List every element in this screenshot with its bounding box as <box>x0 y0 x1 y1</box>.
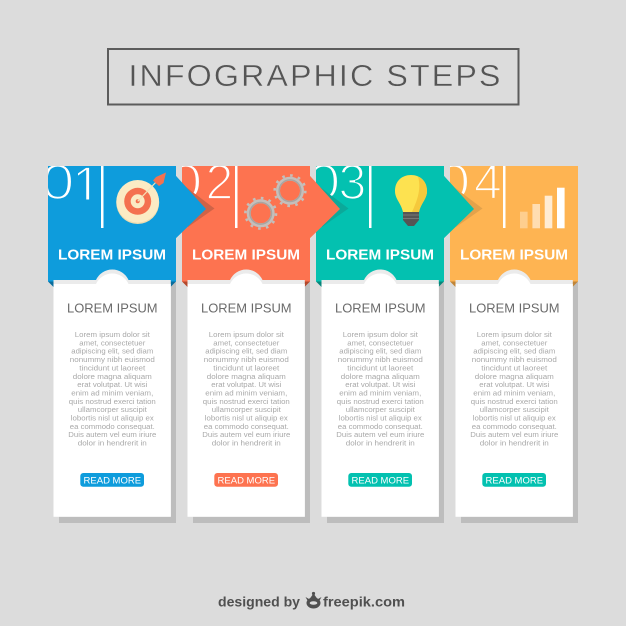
icon: light bulb <box>395 175 427 226</box>
card heading: LOREM IPSUM <box>201 301 292 315</box>
step number 01: 1 <box>72 156 101 216</box>
body text <box>68 332 156 448</box>
body text: adipiscing elit, sed diam <box>473 349 555 356</box>
step number 02 <box>182 166 230 198</box>
body text: Lorem ipsum dolor sit <box>343 332 418 339</box>
body text: ullamcorper suscipit <box>212 407 281 414</box>
step number 04: 4 <box>474 154 502 210</box>
body text <box>202 332 290 448</box>
body text: Lorem ipsum dolor sit <box>477 332 552 339</box>
body text: erat volutpat. Ut wisi <box>211 382 282 389</box>
card heading: LOREM IPSUM <box>67 301 158 315</box>
arrow shadow on step 3 <box>320 187 348 227</box>
panel: step 2 card <box>188 269 305 517</box>
step 3 heading: LOREM IPSUM <box>326 247 434 263</box>
body text: Duis autem vel eum iriure <box>202 432 290 439</box>
read more button: READ MORE <box>486 476 543 486</box>
body text: dolor in hendrerit in <box>212 441 281 448</box>
body text: enim ad minim veniam, <box>205 390 287 397</box>
read more button: READ MORE <box>84 476 141 486</box>
body text <box>336 332 424 448</box>
body text: ullamcorper suscipit <box>346 407 415 414</box>
step number 01: 0 <box>41 154 74 210</box>
body text: enim ad minim veniam, <box>339 390 421 397</box>
body text: Duis autem vel eum iriure <box>470 432 558 439</box>
icon: gears <box>245 175 305 229</box>
step number 03: 0 <box>307 154 340 210</box>
body text: quis nostrud exerci tation <box>203 399 290 406</box>
body text: enim ad minim veniam, <box>71 390 153 397</box>
body text <box>470 332 558 448</box>
body text: ea commodo consequat. <box>204 424 289 431</box>
icon: bar chart <box>520 188 565 228</box>
body text: amet, consectetuer <box>347 340 414 347</box>
panel: step 1 header <box>48 166 214 282</box>
body text: dolor in hendrerit in <box>480 441 549 448</box>
icon: freepik logo <box>306 592 322 608</box>
body text: amet, consectetuer <box>79 340 146 347</box>
body text: adipiscing elit, sed diam <box>71 349 153 356</box>
step number 02: 2 <box>206 154 233 210</box>
footer credit: designed by <box>218 594 300 610</box>
body text: amet, consectetuer <box>481 340 548 347</box>
card heading: LOREM IPSUM <box>335 301 426 315</box>
step 2 heading: LOREM IPSUM <box>192 247 300 263</box>
footer credit: freepik.com <box>323 594 405 610</box>
step number 01 <box>48 166 90 200</box>
panel: step 1 card <box>54 269 171 517</box>
body text: nonummy nibh euismod <box>204 357 289 364</box>
body text: ea commodo consequat. <box>338 424 423 431</box>
body text: ullamcorper suscipit <box>78 407 147 414</box>
body text: nonummy nibh euismod <box>70 357 155 364</box>
panel: step 3 header <box>316 166 482 282</box>
body text: Duis autem vel eum iriure <box>336 432 424 439</box>
body text: dolore magna aliquam <box>73 374 152 381</box>
arrow shadow on step 4 <box>454 187 482 227</box>
step number 03: 3 <box>338 154 366 210</box>
body text: adipiscing elit, sed diam <box>205 349 287 356</box>
step number 02: 0 <box>169 154 202 210</box>
body text: amet, consectetuer <box>213 340 280 347</box>
body text: dolor in hendrerit in <box>346 441 415 448</box>
body text: quis nostrud exerci tation <box>471 399 558 406</box>
panel: step 4 header <box>450 166 578 282</box>
body text: Duis autem vel eum iriure <box>68 432 156 439</box>
body text: dolore magna aliquam <box>475 374 554 381</box>
body text: quis nostrud exerci tation <box>337 399 424 406</box>
body text: dolor in hendrerit in <box>78 441 147 448</box>
step 1 heading: LOREM IPSUM <box>58 247 166 263</box>
body text: ea commodo consequat. <box>70 424 155 431</box>
body text: tincidunt ut laoreet <box>481 365 547 372</box>
panel: step 3 card <box>322 269 439 517</box>
body text: ea commodo consequat. <box>472 424 557 431</box>
title <box>108 49 518 104</box>
body text: lobortis nisl ut aliquip ex <box>339 416 422 422</box>
panel: step 2 header <box>182 166 348 282</box>
read more button: READ MORE <box>352 476 409 486</box>
step number 04 <box>450 166 500 198</box>
corner folds <box>48 282 578 287</box>
card heading: LOREM IPSUM <box>469 301 560 315</box>
body text: dolore magna aliquam <box>341 374 420 381</box>
body text: tincidunt ut laoreet <box>79 365 145 372</box>
read more button: READ MORE <box>218 476 275 486</box>
icon: target with arrow <box>116 172 166 224</box>
body text: Lorem ipsum dolor sit <box>209 332 284 339</box>
step number 03 <box>316 166 364 199</box>
body text: nonummy nibh euismod <box>472 357 557 364</box>
body text: adipiscing elit, sed diam <box>339 349 421 356</box>
body text: lobortis nisl ut aliquip ex <box>205 416 288 422</box>
body text: tincidunt ut laoreet <box>213 365 279 372</box>
body text: nonummy nibh euismod <box>338 357 423 364</box>
body text: lobortis nisl ut aliquip ex <box>473 416 556 422</box>
footer credit <box>218 592 405 610</box>
step 4 heading: LOREM IPSUM <box>460 247 568 263</box>
title: INFOGRAPHIC STEPS <box>128 58 502 93</box>
body text: dolore magna aliquam <box>207 374 286 381</box>
body text: quis nostrud exerci tation <box>69 399 156 406</box>
body text: ullamcorper suscipit <box>480 407 549 414</box>
body text: enim ad minim veniam, <box>473 390 555 397</box>
body text: erat volutpat. Ut wisi <box>77 382 148 389</box>
body text: erat volutpat. Ut wisi <box>345 382 416 389</box>
infographic canvas <box>48 48 578 610</box>
body text: tincidunt ut laoreet <box>347 365 413 372</box>
body text: Lorem ipsum dolor sit <box>75 332 150 339</box>
body text: lobortis nisl ut aliquip ex <box>71 416 154 422</box>
panel: step 4 card <box>456 269 573 517</box>
body text: erat volutpat. Ut wisi <box>479 382 550 389</box>
arrow shadow on step 2 <box>186 187 214 227</box>
card shadows <box>59 281 578 523</box>
step number 04: 0 <box>437 154 470 210</box>
